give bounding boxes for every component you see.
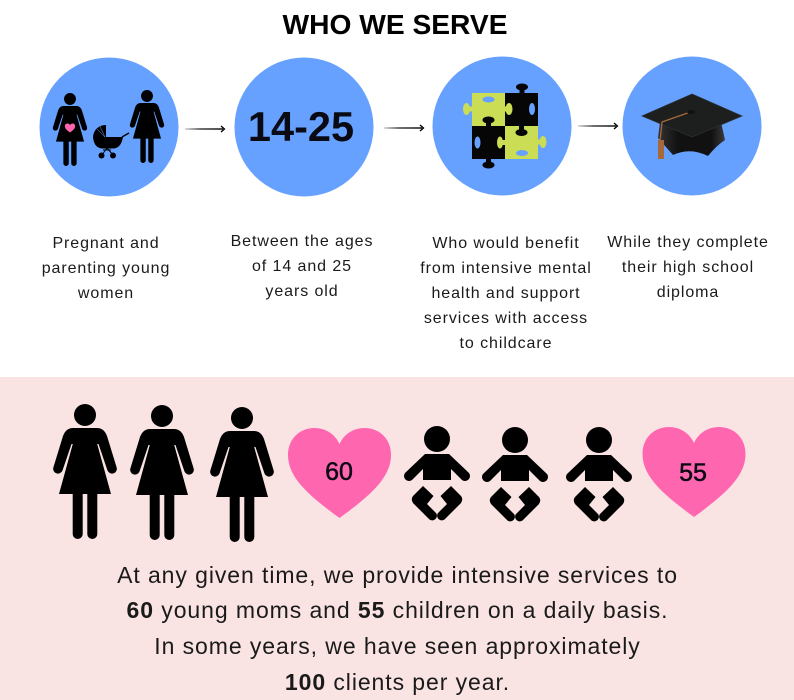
arrow 2 (384, 125, 424, 131)
caption: diploma: diploma (657, 284, 719, 301)
body text: services summary: At any given time, we provide intensive services to (117, 562, 678, 588)
arrow 3 (578, 123, 618, 129)
caption: young women: parenting young (42, 260, 170, 277)
caption: diploma: their high school (622, 259, 754, 276)
title: WHO WE SERVE (282, 8, 508, 40)
caption: ages (231, 233, 373, 300)
babies group (404, 426, 632, 521)
icon: puzzle (463, 84, 546, 168)
caption: ages: years old (265, 283, 339, 300)
icon: heart on belly (65, 124, 75, 132)
arrow 1 (185, 126, 224, 132)
circle: young mothers (40, 58, 178, 196)
caption: benefit: Who would benefit (432, 235, 580, 252)
caption: benefit: services with access (424, 310, 588, 327)
heart: 55 children: 55 (679, 459, 707, 487)
circle: mental health services (432, 56, 572, 196)
caption: diploma (607, 234, 769, 301)
caption: young women: women (78, 285, 134, 302)
caption: benefit: from intensive mental (420, 260, 592, 277)
circle: graduation (622, 56, 762, 196)
caption: diploma: While they complete (607, 234, 769, 251)
icon: baby 1 (404, 426, 470, 520)
icon: woman 2 (130, 405, 194, 540)
caption: benefit: to childcare (460, 335, 552, 352)
circle: age range (234, 58, 374, 196)
women group (53, 404, 274, 542)
caption: ages: of 14 and 25 (252, 258, 352, 275)
body text: services summary: 60 young moms and 55 children on a daily basis. (127, 597, 668, 623)
panel: statistics background (0, 377, 794, 700)
icon: woman 1 (53, 404, 117, 539)
heart: 60 moms: 60 (325, 458, 353, 486)
caption: ages: Between the ages (231, 233, 373, 250)
body text: services summary: 100 clients per year. (285, 669, 510, 695)
body text: services summary (117, 562, 678, 695)
icon: baby stroller (93, 125, 129, 158)
body text: services summary: In some years, we have seen approximately (154, 633, 641, 659)
icon: baby 2 (482, 427, 548, 521)
caption: young women: Pregnant and (52, 235, 160, 252)
caption: benefit (420, 235, 592, 352)
heart: 60 moms (288, 428, 391, 518)
icon: woman 3 (210, 407, 274, 542)
icon: baby 3 (566, 427, 632, 521)
caption: benefit: health and support (431, 285, 581, 302)
puzzle knobs (463, 84, 546, 168)
age label: 14-25 (248, 103, 354, 150)
caption: young women (42, 235, 170, 302)
heart: 55 children (642, 427, 746, 517)
icon: woman (130, 90, 164, 163)
icon: graduation cap (642, 94, 742, 159)
icon: pregnant woman (53, 93, 87, 166)
